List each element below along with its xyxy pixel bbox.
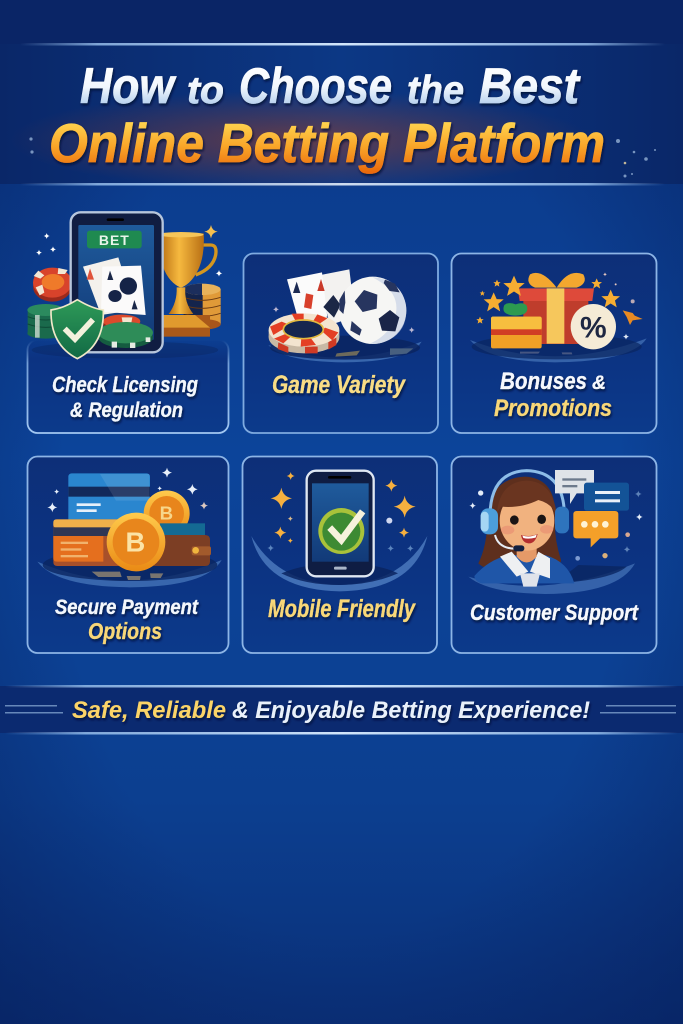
icon: phone, chips, trophy and shield (27, 212, 222, 359)
panel: secure payment options (28, 456, 228, 653)
blue card (68, 473, 150, 527)
label: check licensing (52, 372, 198, 422)
small gift (491, 303, 542, 348)
large coin (107, 513, 165, 571)
dark chips (183, 284, 221, 330)
panel: bonuses and promotions (452, 254, 656, 433)
small coin (144, 490, 190, 536)
icon: chip, cards and football (268, 269, 422, 362)
large coin: B (125, 526, 145, 557)
panel: customer support (452, 456, 656, 653)
trophy (158, 232, 216, 337)
panel: mobile friendly (242, 456, 437, 653)
playing cards (83, 257, 146, 315)
bet button: BET (99, 232, 130, 248)
panel: game variety (244, 254, 438, 433)
label: customer support: Customer Support (470, 600, 639, 625)
title: Choose (239, 58, 392, 114)
label: bonuses and promotions: Promotions (494, 395, 612, 422)
shield (51, 300, 103, 359)
title: Best (479, 58, 581, 114)
body (474, 555, 574, 583)
chips on phone (98, 315, 153, 348)
label: game variety: Game Variety (272, 371, 406, 399)
big gift (518, 273, 594, 344)
label: secure payment options: Options (88, 618, 162, 644)
icon: card, wallet and bitcoin coins (37, 468, 222, 587)
bet button (87, 231, 142, 248)
label: bonuses and promotions: Bonuses (500, 368, 587, 395)
percent coin: % (580, 311, 607, 344)
label: check licensing: & Regulation (70, 399, 183, 422)
label: secure payment options: Secure Payment (55, 596, 199, 619)
icon: support agent with chat bubbles (468, 470, 643, 594)
chip (269, 313, 339, 353)
tagline: & Enjoyable Betting Experience! (232, 697, 590, 724)
title: How (80, 58, 177, 114)
face (517, 543, 537, 562)
phone (71, 212, 163, 352)
percent coin (571, 304, 616, 349)
tagline: Safe, Reliable (72, 697, 226, 724)
chat bubbles (555, 470, 594, 504)
red chip (33, 268, 72, 302)
small coin: B (160, 502, 173, 523)
title: Online Betting Platform (49, 112, 605, 174)
header rules (20, 43, 665, 186)
icon: phone with check mark (251, 471, 427, 591)
title (10, 58, 656, 190)
green chips (27, 304, 64, 339)
title: the (407, 69, 464, 112)
panel: check licensing (27, 212, 229, 433)
label: bonuses and promotions (494, 368, 612, 422)
hair back (478, 477, 561, 569)
headset (490, 471, 564, 513)
football (339, 277, 406, 344)
wallet (53, 519, 211, 566)
label: bonuses and promotions: & (592, 373, 606, 394)
footer banner (0, 685, 683, 734)
icon: gift boxes, stars and percent coin (470, 272, 647, 362)
title: to (187, 70, 224, 112)
label: mobile friendly: Mobile Friendly (268, 595, 416, 623)
cards (287, 269, 355, 325)
label: secure payment options (55, 596, 199, 644)
label: check licensing: Check Licensing (52, 372, 198, 397)
